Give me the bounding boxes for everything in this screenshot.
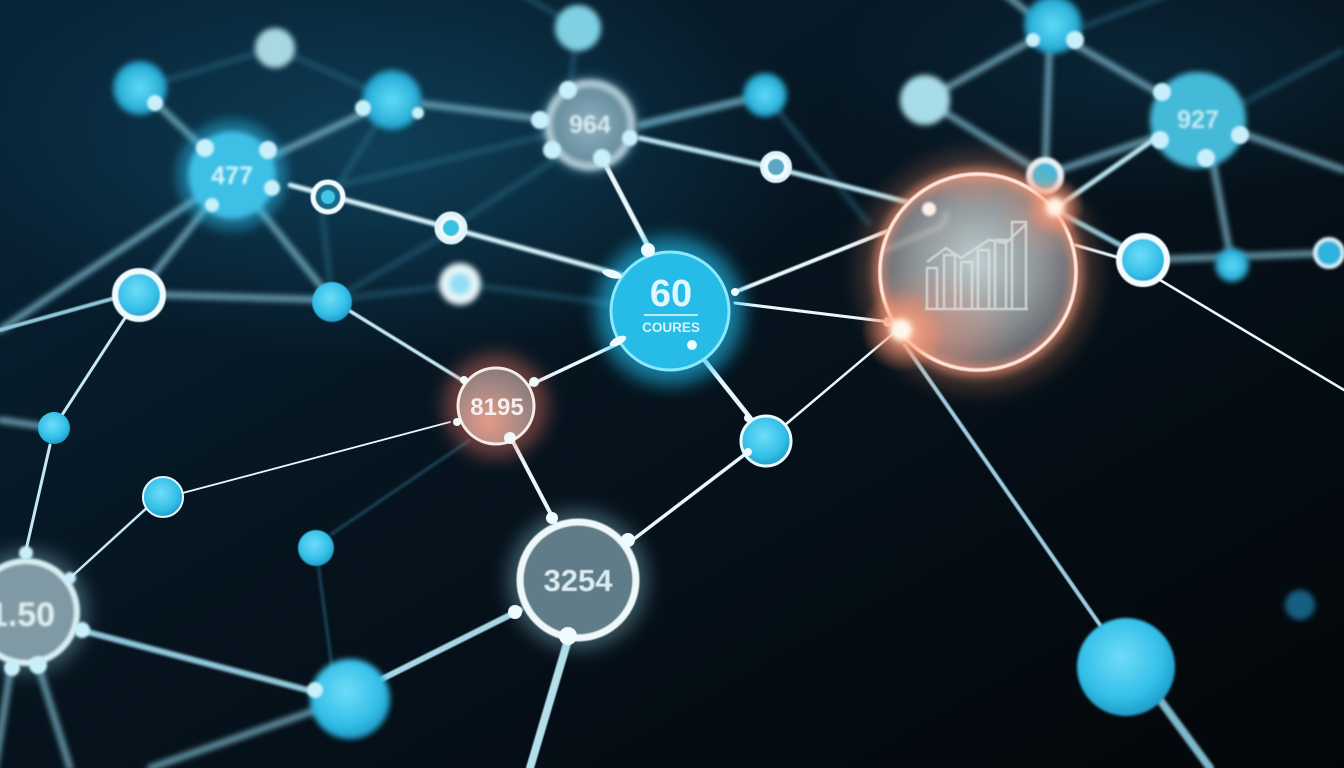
node: 927 [1150, 72, 1246, 168]
icon: bar chart [925, 222, 1028, 309]
node: 927: 927 [1177, 106, 1219, 134]
node: 477: 477 [211, 162, 253, 190]
node: 1.50 [0, 550, 88, 674]
node: 60 courses: 60 [650, 273, 692, 315]
node: 60 courses: COURES [642, 320, 700, 335]
node: 964: 964 [569, 111, 611, 139]
node: 964 [540, 75, 640, 175]
node: 8195: 8195 [470, 394, 524, 421]
node: chart highlight [835, 146, 1105, 405]
junction dots: sharp [453, 243, 893, 645]
small blue nodes [38, 282, 791, 566]
node: 477 [176, 119, 288, 231]
dim lower links [316, 440, 470, 690]
node: 3254: 3254 [544, 563, 613, 598]
ring nodes [115, 153, 1343, 319]
node: 60 courses [596, 237, 744, 385]
big blurred blue nodes [310, 618, 1175, 739]
background dim links [140, 0, 1344, 305]
node: 3254 [508, 510, 648, 650]
node: 8195 [444, 354, 548, 458]
far nodes: blurred [113, 0, 1315, 620]
